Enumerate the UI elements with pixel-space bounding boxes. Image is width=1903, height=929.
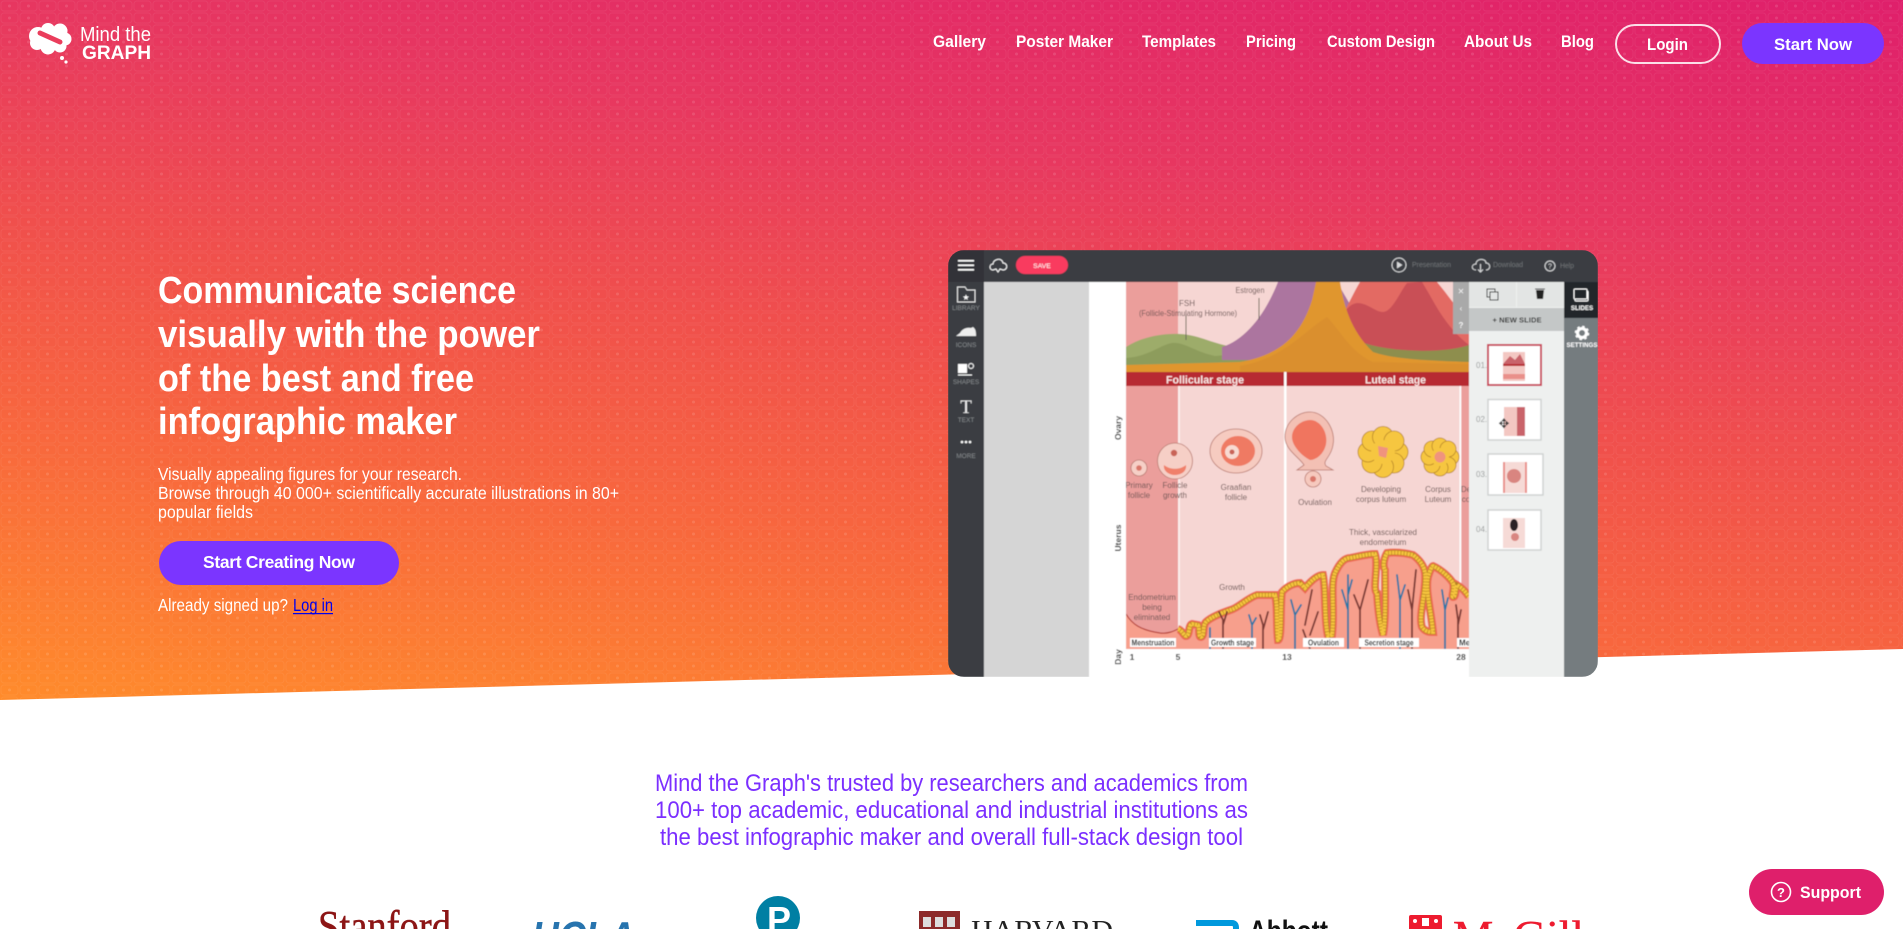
poster axis labels: Ovary [1113,416,1123,440]
poster axis labels: 1 [1130,652,1135,662]
tab: settings: SETTINGS [1567,342,1597,349]
tool: more: MORE [956,453,976,460]
icon: menu [958,260,974,271]
thumbnail 02: 02. [1476,415,1487,424]
phase tags: Ovulation [1308,638,1339,648]
icon: cloud [990,259,1007,272]
tool: text: TEXT [958,417,974,424]
hero paragraph: Visually appealing figures for your research. [158,464,462,484]
poster axis labels: 13 [1282,652,1292,662]
hero gradient background [0,0,1903,700]
thumbnail 03 [1476,454,1543,495]
cell labels: Endometrium [1128,593,1176,602]
logo: Pearson [756,896,800,929]
cell labels: eliminated [1134,613,1170,622]
navigation: Pricing [1246,32,1296,51]
delete button [1517,282,1564,307]
cell labels: Developing [1361,485,1401,494]
poster axis labels: 5 [1176,652,1181,662]
phase tags: Me [1459,638,1471,648]
button: Login [1616,25,1720,63]
thumbnail 04: 04. [1476,525,1487,534]
thumbnail 01: 01. [1476,361,1487,370]
left sidebar tools [952,287,981,460]
canvas control strip: ? [1459,321,1464,330]
thumbnail 01 [1476,345,1541,385]
phase tags: Secretion stage [1364,638,1414,648]
help: ? [1548,264,1552,270]
poster axis labels [1113,416,1466,665]
canvas control strip: ✕ [1458,287,1464,296]
tool: text: T [960,397,972,418]
cell labels: endometrium [1360,538,1407,547]
button: Start Creating Now [159,541,399,585]
phase tags: Menstruation [1132,638,1175,648]
institution logos [318,896,1584,929]
save button [1016,256,1068,274]
download [1472,259,1523,272]
trusted-by heading: the best infographic maker and overall full-stack design tool [660,824,1243,851]
hormone labels [1139,286,1264,318]
hero paragraph: popular fields [158,502,253,522]
hormone labels: FSH [1179,299,1195,308]
navigation: Poster Maker [1016,32,1113,51]
cell labels: Graafian [1221,483,1251,492]
hormone labels: Estrogen [1236,286,1264,295]
hero heading [158,270,540,443]
download: Download [1493,262,1523,269]
button: Start Creating Now: Start Creating Now [203,552,355,572]
navigation: Blog [1561,32,1594,51]
tab: slides [1564,282,1598,318]
cell labels: Ovulation [1298,498,1332,507]
canvas control strip [1453,282,1469,334]
phase tags: Growth stage [1211,638,1254,648]
cell labels: Corpus [1425,485,1451,494]
stage band [1126,372,1469,386]
hormone labels: (Follicle-Stimulating Hormone) [1139,309,1237,318]
new slide button [1469,308,1564,331]
trusted-by heading [655,770,1248,851]
navigation: Gallery [933,32,986,51]
canvas control strip: ‹ [1460,304,1463,313]
navigation: About Us [1464,32,1532,51]
graafian follicle [1210,429,1262,473]
poster axis labels: Day [1113,649,1123,665]
primary follicle [1131,460,1147,476]
cell labels: Thick, vascularized [1349,528,1417,537]
cell labels: Growth [1219,583,1245,592]
button: Login: Login [1647,35,1688,54]
hero heading: visually with the power [158,314,540,356]
button: Start Now [1742,23,1884,64]
help: Help [1560,263,1574,270]
endometrium lining [1126,553,1469,649]
cell labels: being [1142,603,1162,612]
tool: library: ★ [962,293,970,302]
logo: Harvard [919,911,1113,929]
logo wordmark: GRAPH [82,42,151,64]
cell labels: follicle [1225,493,1248,502]
hero heading: infographic maker [158,401,457,443]
icon: help circle: ? [1777,885,1785,900]
logo: McGill [1409,914,1584,929]
hero heading: of the best and free [158,358,474,400]
logo wordmark: Mind the [80,24,151,46]
duplicate button [1469,282,1516,307]
tool: icons [956,327,977,349]
trusted-by heading: Mind the Graph's trusted by researchers and academics from [655,770,1248,797]
tool: text [958,400,974,423]
tool: more [956,441,976,460]
cell labels: corpus luteum [1356,495,1406,504]
stage band: Follicular stage [1166,374,1244,386]
ovulation [1285,412,1333,487]
follicle cells [1131,412,1459,487]
cell labels: De [1461,485,1472,494]
tab: slides: SLIDES [1571,305,1593,312]
save button: SAVE [1033,263,1051,270]
button: Support [1749,869,1884,915]
logo: Abbott [1196,915,1328,929]
slides panel [1469,282,1564,677]
thumbnail 02 [1476,400,1541,440]
tool: shapes [953,364,980,386]
new slide button: + NEW SLIDE [1492,316,1542,324]
cell labels: co [1462,495,1471,504]
right rail [1564,282,1598,677]
corpus luteum [1421,438,1459,476]
tool: library [952,287,981,312]
poster axis labels: Uterus [1113,524,1123,551]
button: Start Now: Start Now [1774,35,1853,54]
button: Support: Support [1800,883,1861,902]
cell labels [1125,481,1472,622]
tool: icons: ICONS [956,342,977,349]
icon: brain [29,23,72,64]
navigation [933,32,1594,51]
stage band: Luteal stage [1365,374,1426,386]
logo wordmark [80,24,151,64]
cell labels: follicle [1128,491,1151,500]
top toolbar [948,250,1598,282]
hero paragraph: Browse through 40 000+ scientifically accurate illustrations in 80+ [158,483,619,503]
phase tags [1130,638,1471,648]
blood vessels [1210,570,1461,649]
follicle growth [1158,443,1192,479]
thumbnail 04 [1476,510,1541,550]
poster artwork [1125,282,1472,649]
thumbnail 03: 03. [1476,470,1487,479]
logo: Mind the Graph [29,23,151,64]
poster axis labels: 28 [1456,652,1466,662]
cell labels: growth [1163,491,1187,500]
tool: library: LIBRARY [952,305,981,312]
navigation: Templates [1142,32,1216,51]
hero heading: Communicate science [158,270,516,312]
sign-in line: Log in [293,595,333,615]
tool: shapes: SHAPES [953,379,980,386]
cell labels: Luteum [1425,495,1452,504]
presentation: Presentation [1412,262,1451,269]
hero paragraph [158,464,619,522]
tab: settings [1567,326,1597,349]
navigation: Custom Design [1327,32,1435,51]
canvas area [984,282,1469,677]
trusted-by heading: 100+ top academic, educational and industrial institutions as [655,797,1248,824]
cell labels: Primary [1125,481,1153,490]
developing corpus luteum [1358,426,1408,478]
thumbnail 02: ✥ [1499,416,1510,431]
cell labels: Follicle [1163,481,1188,490]
sign-in line: Already signed up? [158,595,288,615]
presentation [1392,258,1451,272]
hormone curves chart [1126,282,1469,372]
help [1545,261,1574,271]
editor mockup [948,250,1598,677]
